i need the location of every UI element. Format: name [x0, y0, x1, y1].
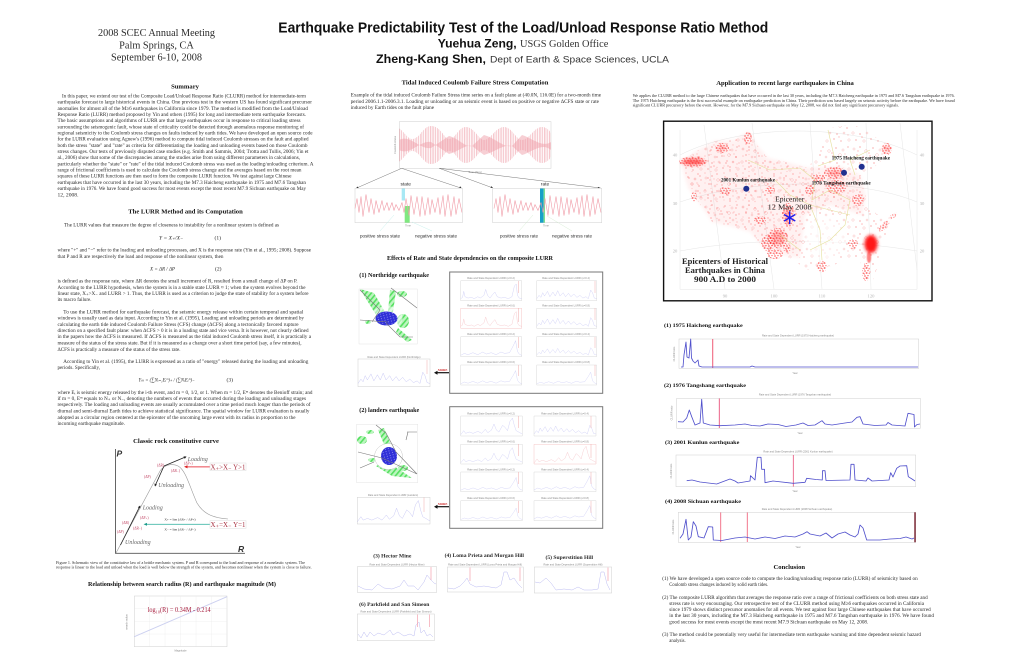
summary text: regional seismicity to the Coulomb stress changes on faults induced by earth tides. We have developed an open source code	[58, 130, 313, 136]
method text: direction on a specified fault plane: when ΔCFS > 0 it is in a loading state and vice versa. It is however, not clearly defined	[58, 327, 309, 334]
chart: constitutive curve: (ΔP₊)	[140, 516, 149, 520]
summary text: stress changes. Our tests of previously disputed case studies (e.g. Smith and Sammis, 2004; Trotta and Tullis, 2006; Yin et	[58, 148, 309, 155]
panel: Hector Mine	[357, 552, 437, 592]
method text: linear state, X₊>X₋ and LURR > 1. Thus, the LURR is used as a criterion to judge the state of stability for a system before	[58, 290, 309, 297]
marker: 2001 Kunlun	[721, 177, 776, 192]
chart: constitutive curve: Loading	[187, 457, 208, 463]
small chart L7: Rate and State Dependent LURR (u=0.6)	[467, 496, 515, 500]
title: Dept of Earth & Space Sciences, UCLA	[490, 55, 670, 66]
chart: constitutive curve: (ΔR)	[157, 464, 165, 468]
conclusion point 2	[662, 594, 934, 626]
panel: LURR method	[58, 208, 313, 427]
conclusion point 2: (2) The composite LURR algorithm that averages the response ratio over a range of frictional coefficients on both stress state and	[662, 594, 928, 601]
map title	[682, 257, 769, 284]
axis labels: 100	[771, 294, 778, 298]
chart: Tangshan: Rate and State Dependent LURR (1976 Tangshan earthquake)	[759, 392, 831, 396]
panel: Kunlun LURR	[665, 439, 916, 493]
marker: 2008 epicenter: 12 May 2008	[768, 202, 812, 211]
small chart N4	[537, 304, 597, 328]
summary text: range of frictional coefficients is used to calculate the Coulomb stress change and the averages based on the root mean	[58, 166, 302, 174]
axis labels	[673, 152, 925, 298]
method text: Yₘ = (∑Nᵢ₌₁Eᵢᵐ)₊ / (∑NᵢEᵢᵐ)₋	[138, 376, 195, 384]
conclusion point 2: since 1979 shows distinct precursor anomalies for all events. We test against four large Chinese earthquakes that have occurred	[669, 606, 931, 613]
heading: tidal stress: Tidal Induced Coulomb Failure Stress Computation	[402, 80, 549, 87]
small chart N7	[461, 360, 522, 385]
earthquake epicenter clusters	[679, 125, 896, 281]
method text: According to the LURR hypothesis, when the system is in a stable state LURR ≈ 1; when the system evolves beyond the	[58, 285, 306, 291]
method text: (1)	[214, 234, 221, 241]
meeting information: 2008 SCEC Annual Meeting	[98, 28, 215, 39]
chart: constitutive curve: Unloading	[158, 483, 184, 489]
map: Landers	[357, 424, 418, 483]
chart: state detail: state	[400, 182, 411, 188]
method text: The LURR values that measure the degree of closeness to instability for a nonlinear system is defined as	[64, 222, 279, 229]
title: Earthquake Predictability Test of the Load/Unload Response Ratio Method	[278, 21, 768, 37]
small chart N3	[461, 304, 522, 328]
panel: Loma Prieta and Morgan Hill	[445, 552, 524, 592]
chart: Loma Prieta: Rate and State Dependent LURR (Loma Prieta and Morgan Hill)	[448, 562, 522, 566]
figure caption	[56, 560, 312, 571]
method text: where "+" and "−" refer to the loading and unloading processes, and X is the response rate (Yin et al., 1995; 2008). Suppose	[58, 246, 311, 254]
small chart N3: Rate and State Dependent LURR (u=0.6)	[467, 304, 515, 308]
method text: (3)	[226, 376, 233, 384]
panel: Haicheng LURR	[664, 322, 919, 375]
chart: state detail: Time	[405, 224, 411, 228]
application description: The 1975 Haicheng earthquake is the first successful example on earthquake prediction in China. Their prediction was based largely on seismic activity before the earthquake. We have found	[633, 98, 955, 103]
chart: constitutive curve: X₊>X₋ Y>1	[210, 464, 246, 472]
chart: constitutive curve: P	[116, 448, 122, 458]
small chart L8: Rate and State Dependent LURR (u=0.8)	[541, 496, 589, 500]
chart: Haicheng: Year	[792, 371, 798, 375]
heading: Kunlun: (3) 2001 Kunlun earthquake	[665, 439, 740, 446]
map title: Earthquakes in China	[685, 266, 766, 275]
panel: search radius relationship	[88, 581, 276, 652]
small chart N8: Rate and State Dependent LURR (u=0.8)	[542, 360, 590, 364]
small chart L3	[461, 440, 522, 464]
axis labels: 40	[920, 152, 925, 158]
small chart L7	[461, 496, 522, 521]
chart: Tangshan: Year	[797, 431, 803, 435]
summary text: earthquake forecast to large historical events in China. One previous test in the western US has found significant precursor	[58, 99, 312, 106]
method text: windows is usually used as data input. According to Yin et al. (1995), Loading and unloading periods are determined by	[58, 314, 304, 322]
chart: Sichuan: Year	[795, 545, 801, 549]
arrow: Landers more	[434, 502, 449, 509]
heading: Sichuan: (4) 2008 Sichuan earthquake	[665, 498, 742, 505]
title: Zheng-Kang Shen,	[376, 52, 486, 66]
panel: Landers parameter charts	[450, 407, 603, 528]
chart: Kunlun: CLURR ratio	[669, 463, 673, 478]
chart: radius vs magnitude	[124, 596, 227, 652]
stress state and rate labels: negative stress rate	[552, 234, 592, 239]
axis labels: 110	[819, 294, 826, 298]
small chart N2: Rate and State Dependent LURR (u=0.4)	[542, 276, 590, 280]
chart: Hector Mine: Rate and State Dependent LURR (Hector Mine)	[370, 562, 425, 566]
chart: Northridge composite LURR: Rate and State Dependent LURR (Northridge)	[367, 355, 421, 359]
meeting information: September 6-10, 2008	[111, 53, 202, 64]
heading: rate and state effects: Effects of Rate and State dependencies on the composite LURR	[387, 255, 553, 262]
heading: LURR method: The LURR Method and its Computation	[128, 208, 243, 215]
heading: Tangshan: (2) 1976 Tangshang earthquake	[664, 382, 747, 389]
method text: To use the LURR method for earthquake forecast, the seismic energy release within certain temporal and spatial	[63, 308, 304, 316]
panel: Northridge earthquake	[358, 272, 603, 393]
small chart L3: Rate and State Dependent LURR (u=0.6)	[467, 440, 515, 444]
panel: conclusion	[662, 564, 934, 644]
chart: Northridge composite LURR	[358, 355, 430, 387]
summary text: anomalies for almost all of the M≥6 earthquakes in California since 1979. The method is modified from the Load/Unload	[58, 105, 308, 112]
small chart N5: Rate and State Dependent LURR (u=0.2)	[467, 332, 515, 336]
chart: Landers composite LURR	[357, 493, 430, 524]
method text: in the papers how the ΔCFS is measured. If ΔCFS is measured as the tidal induced Coulomb stress itself, it is practically a	[58, 333, 311, 340]
marker: 1976 Tangshan	[812, 170, 871, 186]
summary text: 12, 2008.	[58, 192, 79, 198]
application description: We applies the CLURR method to the large Chinese earthquakes that have occurred in the last 30 years, including the M7.3 Haicheng earthquake in 1975 and M7.6 Tangshan earthquake in 1976.	[633, 93, 955, 99]
chart: constitutive curve	[116, 448, 246, 554]
chart: Landers composite LURR: Rate and State Dependent LURR (Landers)	[368, 493, 418, 497]
tidal description: Example of the tidal induced Coulomb Failure Stress time series on a fault plane at (40.0N, 116.0E) for a two-month time	[351, 92, 601, 98]
method text: adopted as a circular region centered at the epicenter of the oncoming large event with its radius in proportion to the	[58, 414, 296, 421]
summary text: squares of these LURR functions are then used to form the composite LURR function. We test against large Chinese	[58, 173, 292, 180]
conclusion point 1	[662, 575, 918, 588]
conclusion point 3: analysis.	[669, 638, 686, 644]
map: Northridge	[359, 288, 417, 344]
small chart N1	[461, 276, 522, 301]
chart: Kunlun: Rate and State Dependent LURR (2001 Kunlun earthquake)	[763, 450, 833, 454]
small chart N6: Rate and State Dependent LURR (u=0.4)	[542, 332, 590, 336]
chart: constitutive curve: X₋ = lim (ΔR₋ / ΔP₋)	[164, 528, 196, 532]
chart: Kunlun: Year	[792, 489, 798, 493]
chart: constitutive curve: (ΔR₋)	[133, 526, 143, 530]
chart: Haicheng	[672, 334, 919, 375]
summary text: In this paper, we extend our test of the Composite Load/Unload Response Ratio (CLURR) method for intermediate-term	[62, 92, 307, 100]
method text: diurnal and semi-diurnal Earth tides to achieve statistical significance. The spatial window for LURR evaluation is usually	[58, 408, 310, 414]
arrow: Northridge more	[434, 368, 449, 375]
small chart L2: Rate and State Dependent LURR (u=0.4)	[541, 412, 589, 416]
chart: radius vs magnitude: log₁₀(R) = 0.34M - 0.214	[148, 606, 211, 614]
summary text: surrounding the seismogenic fault, whose state of criticality could be detected through anomalous response monitoring of	[58, 123, 304, 130]
summary text	[58, 92, 314, 198]
application description: significant CLURR precursory before the event. However, for the M7.9 Sichuan earthquake on May 12, 2008, we did not find any significant precursory signals.	[633, 103, 899, 109]
small chart N8	[537, 360, 597, 385]
chart: Sichuan: Rate and State Dependent LURR (2008 Sichuan earthquake)	[762, 507, 832, 511]
axis labels: 90	[723, 294, 728, 298]
conclusion point 3: (3) The method could be potentially very useful for intermediate term earthquake warning and time dependent seismic hazard	[662, 631, 921, 638]
small chart L6: Rate and State Dependent LURR (u=0.4)	[541, 468, 589, 472]
conclusion point 3	[662, 631, 921, 644]
summary text: both the stress "state" and "rate" as criteria for differentiating the loading and unloading events based on those Coulomb	[58, 142, 308, 149]
method text: ΔCFS is practically a measure of the status of the stress rate.	[58, 346, 181, 353]
heading: Haicheng: (1) 1975 Haicheng earthquake	[664, 322, 743, 329]
small chart N5	[461, 332, 522, 357]
panel: application to China	[633, 80, 955, 301]
axis labels: 40	[673, 152, 678, 158]
conclusion point 2: good success for most events except the most recent M7.9 Sichuan earthquake on May 12, 2008.	[669, 618, 869, 626]
tidal description: period 2006.1.1-2006.3.1. Loading or unloading or an seismic event is based on positive or negative ΔCFS state or rate	[351, 99, 599, 105]
stress state and rate labels	[360, 215, 592, 239]
small chart N6	[537, 332, 597, 357]
marker: 1975 Haicheng	[832, 155, 891, 170]
small chart L4	[534, 440, 596, 464]
arrow: Landers more: MORE	[438, 502, 447, 506]
chart: rate detail: Time	[543, 224, 549, 228]
method text: periods. Specifically,	[58, 364, 101, 371]
chart: Haicheng: CLURR ratio	[672, 346, 676, 361]
heading: Northridge: (1) Northridge earthquake	[359, 272, 429, 279]
marker: 2008 epicenter: Epicenter	[775, 194, 805, 204]
small chart L1	[461, 412, 522, 436]
conclusion point 2: in the last 30 years, including the M7.3 Haicheng earthquake in 1975 and M7.6 Tangshan earthquake in 1976. We have found	[669, 612, 934, 619]
application description	[633, 93, 955, 109]
heading: summary: Summary	[171, 84, 200, 91]
axis labels: 30	[920, 201, 925, 206]
meeting information	[98, 28, 215, 64]
stress state and rate labels: positive stress state	[360, 234, 400, 239]
heading: China application: Application to recent large earthquakes in China	[716, 80, 855, 87]
chart: constitutive curve: (ΔP₊)	[184, 462, 193, 466]
heading: conclusion: Conclusion	[774, 564, 805, 571]
summary text: particularly whether the "state" or "rate" of the tidal induced Coulomb stress was used as the loading/unloading criterium. A	[58, 160, 314, 167]
small chart L6	[534, 468, 596, 492]
title: Yuehua Zeng,	[438, 36, 517, 50]
chart: constitutive curve: (ΔP)	[117, 530, 125, 534]
title: USGS Golden Office	[520, 39, 609, 50]
conclusion point 2: stress rate is very encouraging. Our retrospective test of the CLURR method using M≥6 earthquakes occurred in California	[669, 600, 924, 607]
summary text: Response Ratio (LURR) method proposed by Yin and others (1995) for long and intermediate term earthquake forecasts.	[58, 111, 307, 118]
chart: Kunlun	[669, 450, 916, 493]
heading: rock curve: Classic rock constitutive curve	[133, 438, 219, 445]
figure caption: response is linear to the load and unload when the load is well below the strength of the system, and becomes nonlinear when the system is close to failure.	[56, 565, 312, 571]
small chart N4: Rate and State Dependent LURR (u=0.8)	[542, 304, 590, 308]
summary text: for the LURR evaluation using Agnew's (1996) method to compute tidal induced Coulomb stresses on the fault and applied	[58, 136, 309, 143]
panel: Landers earthquake	[357, 407, 603, 528]
summary text: earthquakes that have occurred in the last 30 years, including the M7.3 Haicheng earthquake in 1975 and M7.6 Tangshan	[58, 180, 306, 186]
marker: 2001 Kunlun: 2001 Kunlun earthquake	[721, 177, 776, 183]
panel: rock constitutive curve	[56, 438, 312, 571]
method text: X = ΔR / ΔP	[149, 266, 176, 272]
summary text: The basic assumptions and algorithms of LURR are that large earthquakes occur in response to critical loading stress	[58, 117, 300, 124]
method text: incoming earthquake magnitude.	[58, 421, 126, 427]
heading: Landers: (2) landers earthquake	[359, 407, 419, 414]
chart: constitutive curve: Unloading	[125, 540, 151, 546]
chart: rate detail	[493, 182, 602, 228]
panel: Tangshan LURR	[664, 382, 920, 435]
axis labels: 120	[868, 294, 875, 298]
chart: Tangshan	[670, 392, 920, 435]
chart: Sichuan	[671, 507, 916, 549]
figure caption: Figure 1. Schematic view of the constitutive law of a brittle mechanic system. P and R correspond to the load and response of a nonelastic system. The	[56, 560, 305, 565]
panel: Northridge parameter charts	[450, 272, 603, 393]
panel: Superstition Hill	[534, 554, 612, 593]
summary text: earthquake in 1976. We have found good success for most events except the most recent M7.9 Sichuan earthquake on May	[58, 185, 306, 192]
conclusion point 1: (1) We have developed a open source code to compute the loading/unloading response ratio (LURR) of seismicity based on	[662, 575, 918, 582]
heading: Superstition Hill: (5) Superstition Hill	[546, 554, 594, 561]
method text: its macro failure.	[58, 296, 92, 303]
method text: measure of the status of the stress state. But if it is measured as a change over a short time period (say, a few minutes),	[58, 340, 302, 346]
tidal description: induced by Earth tides on the fault plane	[351, 104, 434, 111]
small chart L8	[534, 496, 596, 521]
heading: radius and magnitude: Relationship between search radius (R) and earthquake magnitude (M)	[88, 581, 276, 588]
small chart N1: Rate and State Dependent LURR (u=0.2)	[467, 276, 515, 280]
tidal description	[351, 92, 601, 111]
chart: Haicheng: Rate and State Dependent LURR (1975 Haicheng earthquake)	[762, 334, 834, 338]
axis labels: 30	[673, 201, 678, 206]
method text: if m = 0, Eᵐ equals to N₊ or N₋, denoting the numbers of events that occurred during the loading and unloading stages	[58, 395, 306, 402]
marker: 1976 Tangshan: 1976 Tangshan earthquake	[812, 180, 871, 186]
panel: Sichuan LURR	[665, 498, 916, 549]
marker: 2008 epicenter	[768, 194, 812, 224]
summary text: al., 2006) show that some of the discrepancies among the studies arise from using different parameters in calculations,	[58, 154, 301, 161]
method text	[58, 222, 313, 427]
chart: constitutive curve: X₊ = lim (ΔR₊ / ΔP₊)	[164, 518, 196, 522]
chart: Parkfield: Rate and State Dependent LURR (Parkfield and San Simeon)	[361, 610, 432, 614]
axis labels: 20	[920, 248, 925, 254]
small chart L2	[534, 412, 596, 436]
chart: rate detail: rate	[541, 182, 549, 188]
method text: respectively. The loading and unloading events are usually accumulated over a time period much longer than the periods of	[58, 401, 311, 408]
chart: tidal time series: Coulomb stress	[393, 135, 397, 154]
small chart L1: Rate and State Dependent LURR (u=0.2)	[467, 412, 515, 416]
chart: state detail	[355, 182, 462, 228]
heading: Hector Mine: (3) Hector Mine	[373, 552, 412, 560]
chart: tidal time series	[393, 122, 551, 174]
method text: (2)	[215, 266, 222, 272]
method text: According to Yin et al. (1995), the LURR is expressed as a ratio of "energy" released during the loading and unloading	[63, 358, 308, 365]
method text: is defined as the response rate, where ΔR denotes the small increment of R, resulted from a small change of ΔP on P.	[58, 278, 298, 284]
chart: constitutive curve: Loading	[142, 506, 163, 512]
map province lines	[748, 130, 870, 260]
small chart N7: Rate and State Dependent LURR (u=0.6)	[467, 360, 515, 364]
small chart L5	[461, 468, 522, 492]
chart: radius vs magnitude: search radius	[124, 614, 128, 630]
chart: radius vs magnitude: Magnitude	[174, 648, 187, 652]
axis labels: 20	[673, 248, 678, 254]
map graticule	[680, 123, 917, 289]
chart: constitutive curve: (ΔR₋)	[171, 469, 181, 473]
map: historical earthquakes in China	[664, 121, 932, 301]
method text: that P and R are respectively the load and response of the nonlinear system, then	[58, 253, 224, 260]
title	[278, 21, 768, 66]
chart: constitutive curve: (ΔR)	[122, 521, 130, 525]
chart: tidal time series: Time (days)	[468, 170, 482, 174]
heading: Loma Prieta: (4) Loma Prieta and Morgan Hill	[445, 552, 524, 559]
map title: 900 A.D to 2000	[694, 275, 756, 284]
panel: Parkfield and San Simeon	[357, 601, 434, 641]
conclusion point 1: Coulomb stress changes induced by solid earth tides.	[669, 582, 769, 588]
meeting information: Palm Springs, CA	[119, 40, 194, 51]
stress state and rate labels: positive stress rate	[500, 234, 538, 239]
small chart L5: Rate and State Dependent LURR (u=0.2)	[467, 468, 515, 472]
heading: Parkfield: (6) Parkfield and San Simeon	[359, 601, 430, 608]
chart: Sichuan: CLURR ratio	[671, 519, 675, 534]
arrow: Northridge more: MORE	[438, 368, 447, 372]
stress state and rate labels: negative stress state	[415, 234, 457, 239]
small chart N2	[537, 276, 597, 301]
chart: constitutive curve: X₊=X₋ Y=1	[210, 521, 246, 529]
chart: constitutive curve: (ΔP)	[144, 475, 152, 479]
method text: calculating the earth tide induced Coulomb Failure Stress (CFS) change (ΔCFS) along a tectonically favored rupture	[58, 321, 299, 328]
panel: tidal stress computation	[351, 80, 602, 239]
chart: Superstition Hill: Rate and State Dependent LURR (Superstition Hill)	[544, 562, 603, 566]
chart: Tangshan: CLURR ratio	[670, 405, 674, 420]
chart: constitutive curve: R	[238, 544, 245, 554]
map title: Epicenters of Historical	[682, 257, 769, 266]
method text: where Eᵢ is seismic energy released by the i-th event, and m = 0, 1/2, or 1. When m = 1/2, Eᵐ denotes the Benioff strain; and	[58, 389, 313, 396]
method text: Y = X₊/X₋	[159, 235, 183, 241]
marker: 1975 Haicheng: 1975 Haicheng earthquake	[832, 155, 891, 161]
zoom connector arrows	[356, 168, 600, 189]
panel: summary	[58, 84, 314, 198]
small chart L4: Rate and State Dependent LURR (u=0.8)	[541, 440, 589, 444]
